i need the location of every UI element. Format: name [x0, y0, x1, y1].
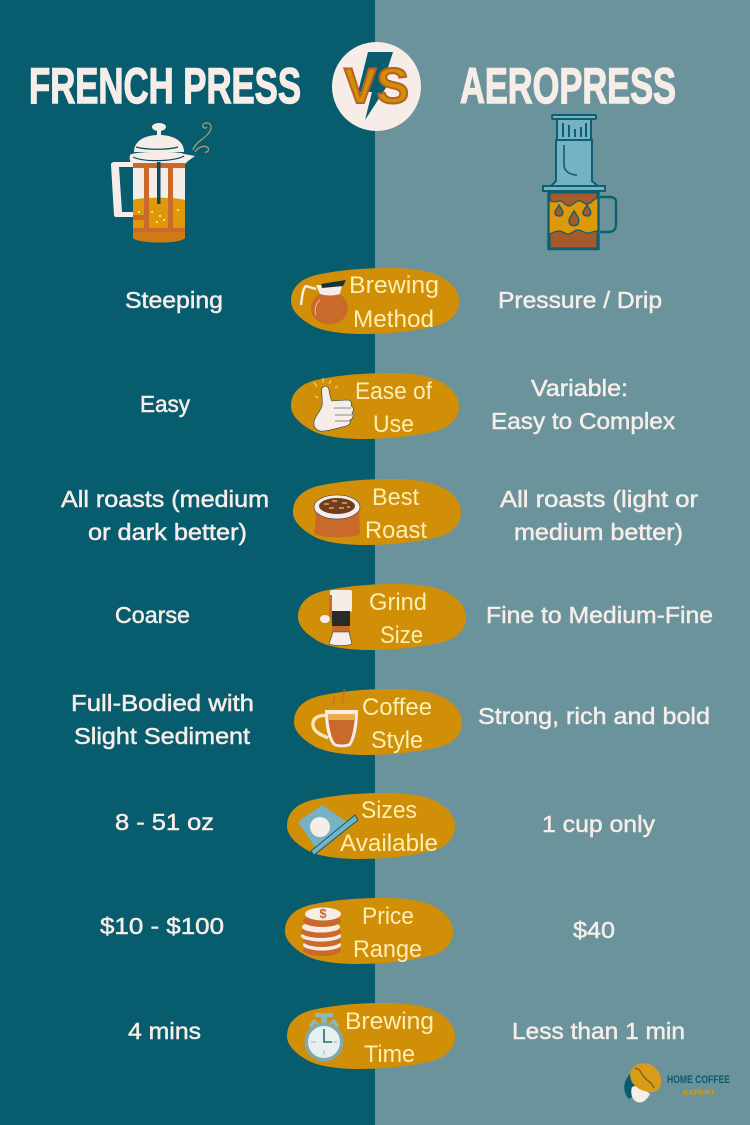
text: French Press brewing time: 4 mins [128, 1018, 201, 1044]
icon: thumbs up [314, 378, 353, 431]
text: AeroPress best roast: All roasts (light or [500, 486, 698, 512]
label: Time [364, 1041, 415, 1068]
label: Brewing [349, 272, 439, 299]
label: Price [362, 903, 414, 930]
label: Roast [365, 517, 427, 544]
label: Ease of [355, 378, 432, 405]
label: Use [373, 411, 414, 438]
label [365, 484, 427, 544]
label: Method [353, 306, 434, 333]
text: AeroPress coffee style: Strong, rich and bold [478, 703, 710, 729]
pill: grind size [298, 584, 466, 650]
text: AeroPress brewing method: Pressure / Drip [498, 287, 662, 313]
text: AeroPress sizes: 1 cup only [542, 811, 656, 837]
label: Size [380, 622, 423, 649]
text: AeroPress ease of use [491, 375, 676, 434]
label: Available [340, 830, 438, 857]
icon: coffee grinder [320, 590, 352, 646]
label [355, 378, 432, 438]
text: French Press coffee style: Full-Bodied with [71, 690, 254, 716]
logo: Home Coffee Expert: HOME COFFEE [667, 1074, 730, 1086]
text: AeroPress ease of use: Easy to Complex [491, 408, 676, 434]
row: brewing method [125, 268, 662, 334]
pill: sizes available [287, 793, 455, 859]
icon: coffee bag [314, 495, 360, 537]
text: French Press best roast [61, 486, 269, 545]
text: French Press ease of use: Easy [140, 391, 190, 417]
label: Brewing [345, 1008, 434, 1035]
row: coffee style [71, 689, 710, 755]
text: French Press best roast: or dark better) [88, 519, 247, 545]
VS badge: VS [344, 58, 409, 114]
pill: coffee style [294, 689, 462, 755]
text: French Press best roast: All roasts (medium [61, 486, 269, 512]
logo: Home Coffee Expert [624, 1063, 730, 1103]
text: AeroPress best roast [500, 486, 698, 545]
label: Sizes [361, 797, 417, 824]
pill: ease of use [291, 373, 459, 439]
icon: french press [111, 123, 211, 242]
text: AeroPress price: $40 [573, 917, 615, 943]
row: brewing time [128, 1003, 685, 1069]
panel: AeroPress background [375, 0, 750, 1125]
text: French Press price: $10 - $100 [100, 913, 224, 939]
text: AeroPress ease of use: Variable: [531, 375, 628, 401]
VS badge [332, 42, 421, 131]
label: Grind [369, 589, 427, 616]
label: Best [372, 484, 419, 511]
text: French Press brewing method: Steeping [125, 287, 223, 313]
label: Range [353, 936, 422, 963]
logo: Home Coffee Expert: EXPERT [683, 1090, 716, 1097]
text: AeroPress brewing time: Less than 1 min [512, 1018, 685, 1044]
label: Style [371, 727, 423, 754]
row: sizes available [115, 793, 656, 859]
text: French Press coffee style [71, 690, 254, 749]
pill: brewing method [291, 268, 459, 334]
label [340, 797, 438, 857]
row: price range [100, 898, 615, 964]
icon: coffee carafe [301, 280, 348, 324]
text: AeroPress best roast: medium better) [514, 519, 683, 545]
pill: brewing time [287, 1003, 455, 1069]
label [349, 272, 439, 333]
label [369, 589, 427, 649]
text: French Press sizes: 8 - 51 oz [115, 809, 214, 835]
row: grind size [115, 584, 713, 650]
dollar sign: $ [319, 906, 327, 921]
text: French Press coffee style: Slight Sediment [74, 723, 251, 749]
row: best roast [61, 479, 698, 545]
text: AeroPress grind size: Fine to Medium-Fine [486, 602, 713, 628]
label [362, 694, 432, 754]
heading: French Press: FRENCH PRESS [29, 58, 301, 114]
pill: best roast [293, 479, 461, 545]
label [345, 1008, 434, 1068]
icon: measuring tape [298, 805, 358, 855]
icon: coffee cup [313, 689, 358, 747]
pill: price range [285, 898, 453, 964]
row: ease of use [140, 373, 676, 439]
label: Coffee [362, 694, 432, 721]
icon: coin stack [301, 906, 341, 956]
icon: aeropress [543, 115, 616, 249]
text: French Press grind size: Coarse [115, 602, 190, 628]
panel: French Press background [0, 0, 375, 1125]
label [353, 903, 422, 963]
icon: stopwatch [304, 1013, 344, 1062]
